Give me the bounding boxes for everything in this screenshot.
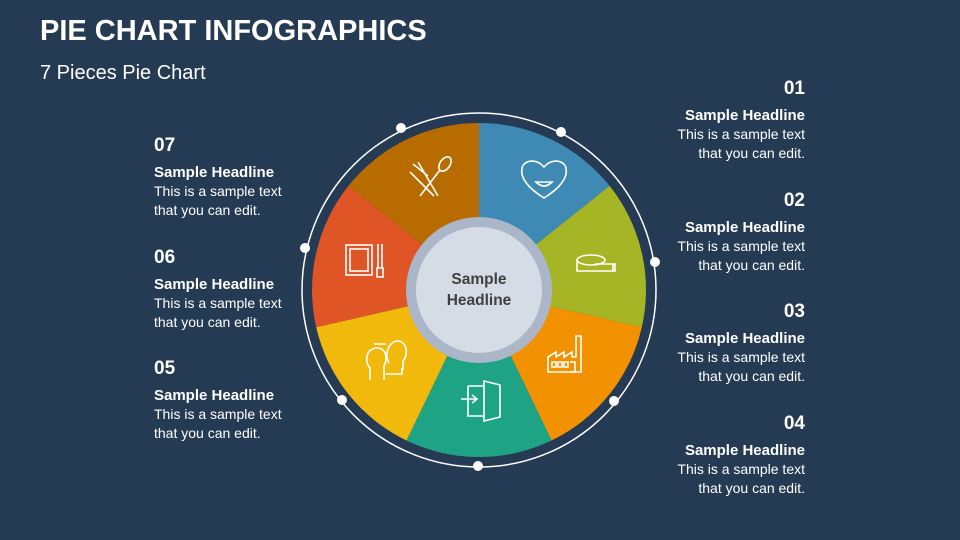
item 02 <box>677 190 805 273</box>
item 02: Sample Headline <box>685 218 805 236</box>
item 02: This is a sample text <box>677 238 805 254</box>
item 04 <box>677 413 805 496</box>
item 01: that you can edit. <box>698 144 805 160</box>
item 01 <box>677 78 805 161</box>
icon: tape measure <box>577 255 615 271</box>
icons <box>346 155 615 421</box>
center circle: Sample <box>451 271 507 288</box>
item 04: that you can edit. <box>698 480 805 496</box>
item 01: Sample Headline <box>685 106 805 124</box>
icon: heads <box>367 341 406 380</box>
icon: factory <box>548 336 581 372</box>
item 06: This is a sample text <box>154 295 282 311</box>
item 04: This is a sample text <box>677 461 805 477</box>
item 05 <box>154 358 282 441</box>
item 03: 03 <box>784 301 805 322</box>
center circle: Headline <box>447 292 512 309</box>
item 07: This is a sample text <box>154 183 282 199</box>
item 06: 06 <box>154 247 175 268</box>
item 02: that you can edit. <box>698 256 805 272</box>
item 07 <box>154 135 282 218</box>
item 02: 02 <box>784 190 805 211</box>
icon: heart <box>522 161 566 198</box>
item 05: This is a sample text <box>154 406 282 422</box>
item 05: Sample Headline <box>154 386 274 404</box>
item 04: Sample Headline <box>685 442 805 458</box>
title: PIE CHART INFOGRAPHICS <box>40 15 427 47</box>
item 07: 07 <box>154 135 175 156</box>
slices <box>312 123 646 457</box>
item 06: Sample Headline <box>154 276 274 292</box>
item 07: Sample Headline <box>154 164 274 180</box>
icon: tablet <box>346 244 383 277</box>
outer ring <box>300 113 660 471</box>
item 03 <box>677 301 805 384</box>
center circle <box>406 217 552 363</box>
item 06 <box>154 247 282 330</box>
item 05: 05 <box>154 358 175 379</box>
item 04: 04 <box>784 413 805 434</box>
item 03: Sample Headline <box>685 330 805 346</box>
item 01: 01 <box>784 78 805 99</box>
icon: door <box>461 381 500 421</box>
item 06: that you can edit. <box>154 314 261 330</box>
item 01: This is a sample text <box>677 126 805 142</box>
item 03: This is a sample text <box>677 349 805 365</box>
item 05: that you can edit. <box>154 424 261 440</box>
icon: fork and spoon <box>410 155 454 196</box>
item 03: that you can edit. <box>698 368 805 384</box>
item 07: that you can edit. <box>154 202 261 218</box>
subtitle: 7 Pieces Pie Chart <box>40 62 206 84</box>
